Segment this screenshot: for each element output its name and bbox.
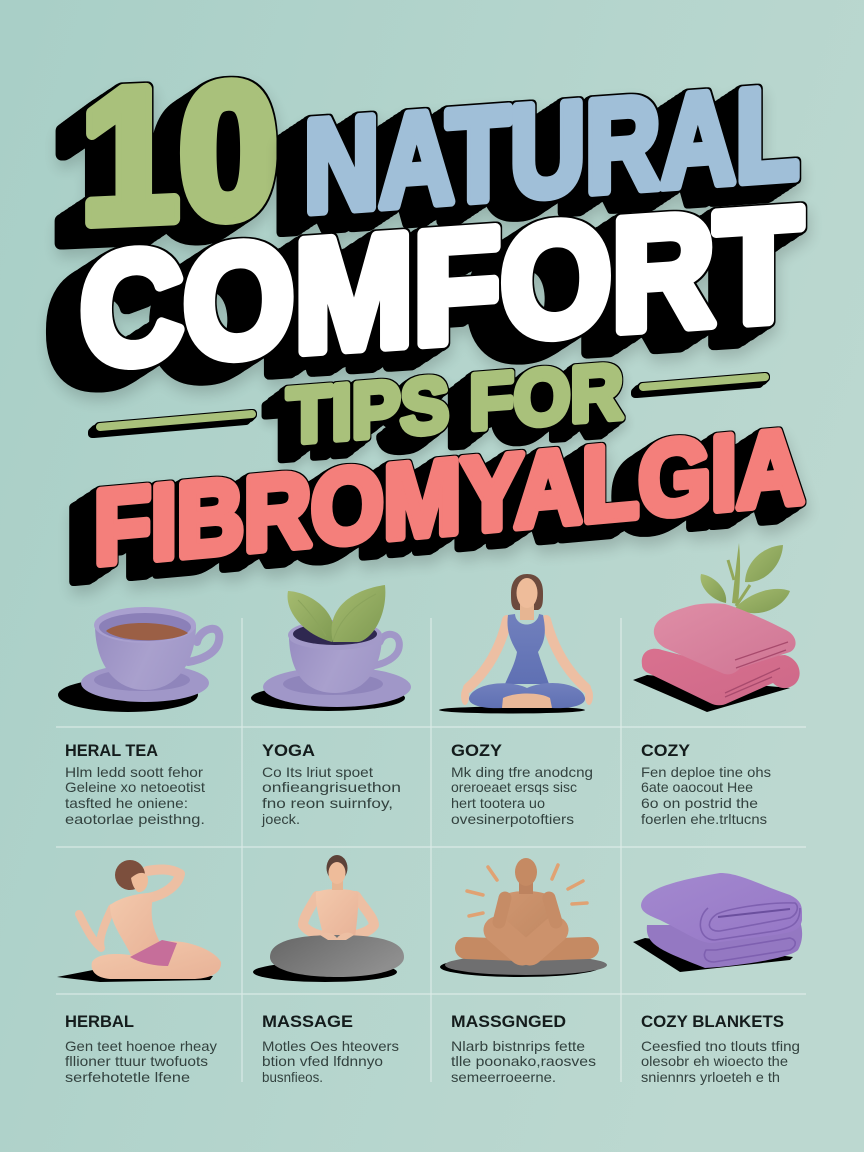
icon: purple blankets bbox=[633, 873, 802, 972]
icon: tea cup with leaves bbox=[251, 585, 411, 711]
tip: herbal: fllioner ttuur twofuots bbox=[65, 1053, 208, 1069]
title: 10: 10 bbox=[80, 43, 278, 264]
tip: herbal bbox=[65, 1012, 217, 1085]
decorative bar left bbox=[100, 414, 252, 427]
tip: gozy: GOZY bbox=[451, 741, 503, 760]
tip: massgnged: tlle poonako,raosves bbox=[451, 1053, 596, 1069]
tip: massgnged bbox=[451, 1012, 596, 1085]
tip: cozy blankets: COZY BLANKETS bbox=[641, 1012, 784, 1031]
tip: herbal: HERBAL bbox=[65, 1012, 134, 1031]
tip: cozy bbox=[641, 741, 771, 827]
tip: massage: btion vfed lfdnnyo bbox=[262, 1053, 383, 1069]
title: COMFORT: COMFORT bbox=[80, 174, 802, 400]
tip: massage: MASSAGE bbox=[262, 1012, 353, 1031]
tip: cozy blankets: olesobr eh wioecto the bbox=[641, 1053, 788, 1069]
tip: yoga: fno reon suirnfoy, bbox=[262, 795, 393, 811]
icon: massage figure with rays bbox=[440, 858, 607, 977]
icon: pink towels and plant bbox=[633, 543, 800, 712]
tip: cozy blankets: Ceesfied tno tlouts tfing bbox=[641, 1038, 800, 1054]
tip: massgnged: MASSGNGED bbox=[451, 1012, 566, 1031]
section: row 1 tips bbox=[65, 741, 771, 827]
tip: herbal: Gen teet hoenoe rheay bbox=[65, 1038, 217, 1054]
tip: cozy: 6o on postrid the bbox=[641, 795, 758, 811]
icon: person on cushion bbox=[253, 855, 404, 982]
grid lines bbox=[56, 618, 806, 1082]
tip: massage: Motles Oes hteovers bbox=[262, 1038, 399, 1054]
icon: yoga woman bbox=[439, 574, 593, 714]
tip: cozy blankets: sniennrs yrloeteh e th bbox=[641, 1069, 780, 1085]
tip: yoga: YOGA bbox=[262, 741, 315, 760]
icon: stretching person bbox=[57, 860, 221, 982]
tip: cozy: 6ate oaocout Hee bbox=[641, 779, 753, 795]
title: TIPS FOR: TIPS FOR bbox=[287, 347, 623, 460]
tip: herbal tea: Hlm ledd soott fehor bbox=[65, 764, 203, 780]
tip: gozy bbox=[451, 741, 593, 827]
decorative bar right bbox=[643, 377, 765, 387]
tip: herbal tea: Geleine xo netoeotist bbox=[65, 779, 205, 795]
tip: massage: busnfieos. bbox=[262, 1069, 323, 1085]
tip: herbal tea: tasfted he oniene: bbox=[65, 795, 188, 811]
tip: gozy: oreroeaet ersqs sisc bbox=[451, 779, 577, 795]
tip: massgnged: Nlarb bistnrips fette bbox=[451, 1038, 585, 1054]
tip: yoga bbox=[261, 741, 401, 827]
tip: yoga: onfieangrisuethon bbox=[262, 779, 401, 795]
tip: cozy: foerlen ehe.trltucns bbox=[641, 811, 767, 827]
tip: cozy blankets bbox=[641, 1012, 800, 1085]
tip: cozy: Fen deploe tine ohs bbox=[641, 764, 771, 780]
tip: yoga: joeck. bbox=[261, 811, 300, 827]
tip: massage bbox=[262, 1012, 399, 1085]
tip: herbal tea: HERAL TEA bbox=[65, 741, 158, 760]
tip: yoga: Co Its lriut spoet bbox=[262, 764, 373, 780]
tip: gozy: ovesinerpotoftiers bbox=[451, 811, 574, 827]
tip: massgnged: semeerroeerne. bbox=[451, 1069, 556, 1085]
tip: gozy: hert tootera uo bbox=[451, 795, 545, 811]
tip: herbal: serfehotetle lfene bbox=[65, 1069, 190, 1085]
tip: herbal tea bbox=[65, 741, 205, 827]
tip: gozy: Mk ding tfre anodcng bbox=[451, 764, 593, 780]
section: row 2 tips bbox=[65, 1012, 800, 1085]
icon: herbal tea cup bbox=[58, 607, 219, 712]
tip: herbal tea: eaotorlae peisthng. bbox=[65, 811, 205, 827]
tip: cozy: COZY bbox=[641, 741, 691, 760]
